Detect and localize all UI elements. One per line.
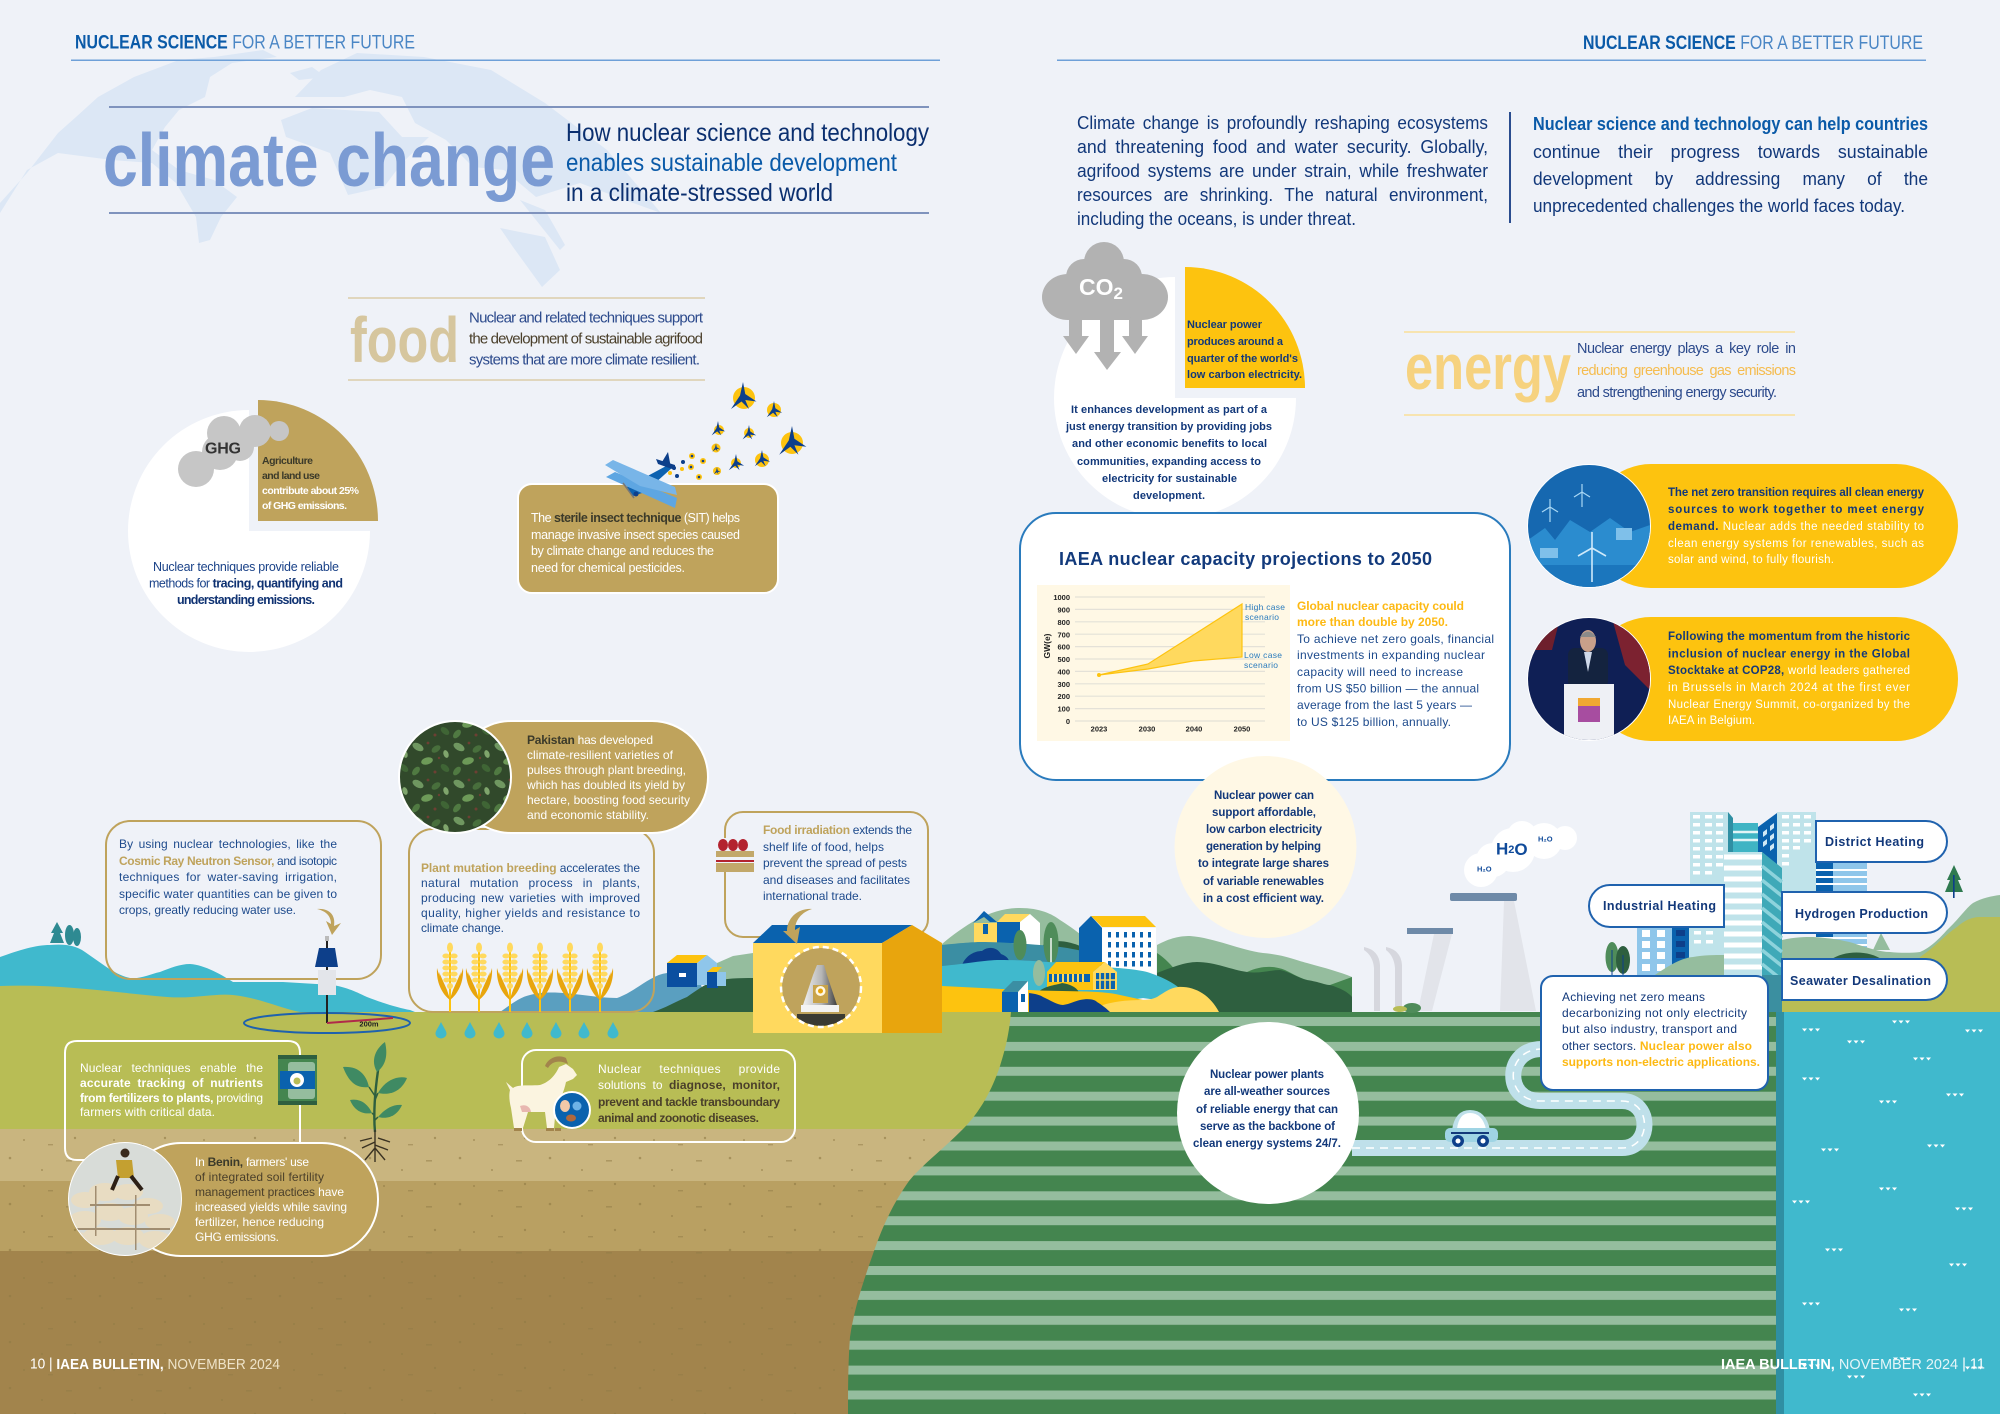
yellow fields xyxy=(942,986,1143,1012)
pill: industrial heating: Industrial Heating xyxy=(1603,899,1716,913)
city back buildings xyxy=(1637,812,1867,977)
icon: pale tree behind hill xyxy=(1873,933,1890,950)
pill: district heating: District Heating xyxy=(1825,835,1924,849)
panel heading: IAEA nuclear capacity projections to 2050 xyxy=(1059,549,1432,569)
energy heading: Nuclear energy plays a key role in xyxy=(1577,341,1796,357)
pill text xyxy=(1668,487,1925,566)
icon: blue and white house xyxy=(997,914,1040,945)
intro lead text: continue their progress towards sustainable xyxy=(1533,142,1928,162)
wedge text: produces around a xyxy=(1187,336,1284,348)
icons: trees xyxy=(1014,922,1058,964)
line chart: scenario xyxy=(1244,660,1278,670)
callout: affordable low carbon generation: in a cost efficient way. xyxy=(1203,893,1324,905)
pill text: Nuclear Energy Summit, co-organized by the xyxy=(1668,699,1910,711)
pill text: increased yields while saving xyxy=(195,1200,347,1214)
pill text: climate-resilient varieties of xyxy=(527,748,674,762)
chart commentary: capacity will need to increase xyxy=(1297,665,1463,679)
icon: aeroplane xyxy=(605,452,677,508)
label: CO2: 2 xyxy=(1114,284,1123,302)
callout: nuclear power plants: clean energy systems 24/7. xyxy=(1193,1138,1341,1150)
pill text: Pakistan has developed xyxy=(527,733,653,747)
panel: food irradiation: international trade. xyxy=(763,889,862,903)
panel: plant mutation breeding xyxy=(409,829,654,1012)
line chart: 900 xyxy=(1057,606,1070,614)
callout: nuclear power plants: of reliable energy that can xyxy=(1196,1104,1338,1116)
food heading: systems that are more climate resilient. xyxy=(469,352,700,368)
H2O cloud: H xyxy=(1496,840,1508,858)
pill text: GHG emissions. xyxy=(195,1230,279,1244)
line chart: 800 xyxy=(1057,618,1070,627)
sea wave marks xyxy=(1792,1020,1983,1396)
panel: animal diseases: prevent and tackle transboundary xyxy=(598,1095,780,1109)
H2O cloud: 2 xyxy=(1508,844,1514,856)
line chart xyxy=(1037,585,1290,741)
pill text: in Brussels in March 2024 at the first ever xyxy=(1668,682,1910,694)
icon: irradiator xyxy=(781,947,861,1030)
sea xyxy=(1776,1011,2000,1414)
icon: large white building xyxy=(1079,916,1156,974)
label: GHG: GHG xyxy=(205,440,241,458)
pill: nuclear energy summit xyxy=(1527,617,1958,742)
intro text: agrifood systems are under strain, while freshwater xyxy=(1077,161,1488,181)
pill: net zero transition xyxy=(1527,464,1958,588)
callout: affordable low carbon generation: support affordable, xyxy=(1212,807,1316,819)
white circle with cut quadrant xyxy=(1054,277,1296,519)
chart commentary: investments in expanding nuclear xyxy=(1297,648,1485,662)
icon: sterile insects xyxy=(668,382,806,480)
pill text: demand. Nuclear adds the needed stability to xyxy=(1668,521,1924,533)
pill text xyxy=(1668,631,1911,727)
line chart: scenario xyxy=(1245,612,1279,622)
pill: seawater desalination xyxy=(1782,959,1947,1000)
vertical divider xyxy=(1509,112,1511,223)
panel: nutrient tracking: farmers with critical data. xyxy=(80,1105,215,1119)
pill text: sources to work together to meet energy xyxy=(1668,504,1925,516)
hills and houses of town xyxy=(942,908,1219,1012)
energy heading xyxy=(1404,331,1796,416)
icon: neutron sensor xyxy=(244,936,410,1033)
arrow: to sensor xyxy=(317,909,341,935)
right page footer: IAEA BULLETIN, NOVEMBER 2024 | 11 xyxy=(1721,1356,1985,1372)
icon: water drops xyxy=(436,1022,618,1038)
line chart: 2040 xyxy=(1186,724,1202,734)
panel: animal diseases: solutions to diagnose, monitor, xyxy=(598,1078,780,1092)
hills east of town xyxy=(1157,936,1352,1012)
panel: plant mutation breeding: quality, higher yields and resistance to xyxy=(421,906,640,920)
pill text: solar and wind, to fully flourish. xyxy=(1668,554,1834,566)
icon: wheat row xyxy=(437,942,613,1012)
left page footer: 10 | IAEA BULLETIN, NOVEMBER 2024 xyxy=(30,1356,280,1372)
icon: CO2 cloud and arrows xyxy=(1042,242,1168,370)
panel: water-saving irrigation: Cosmic Ray Neutron Sensor, and isotopic xyxy=(119,854,337,868)
ground: olive field xyxy=(0,986,1012,1129)
H2O cloud xyxy=(1464,821,1577,887)
pill text: which has doubled its yield by xyxy=(526,778,685,792)
panel: plant mutation breeding: natural mutation process in plants, xyxy=(421,876,640,890)
barn with irradiator xyxy=(753,925,942,1033)
callout: affordable low carbon generation: generation by helping xyxy=(1206,841,1321,853)
line chart: 500 xyxy=(1057,655,1070,664)
wedge text xyxy=(262,455,360,512)
intro lead text: unprecedented challenges the world faces today. xyxy=(1533,196,1905,216)
line chart: High case xyxy=(1245,602,1285,612)
panel: water-saving irrigation: specific water quantities can be given to xyxy=(119,887,337,901)
pill text: fertilizer, hence reducing xyxy=(195,1215,324,1229)
food heading xyxy=(348,297,705,381)
pill text: and economic stability. xyxy=(527,808,649,822)
circle text: just energy transition by providing jobs xyxy=(1065,421,1272,433)
icon: fertilizer bag xyxy=(278,1055,317,1105)
right hills xyxy=(1782,895,2000,1012)
panel: animal diseases: animal and zoonotic diseases. xyxy=(598,1111,759,1125)
wedge text: contribute about 25% xyxy=(262,485,360,497)
photo: farmer on sacks xyxy=(66,1142,182,1257)
line chart: 2050 xyxy=(1234,724,1250,734)
callout: affordable low carbon generation: low carbon electricity xyxy=(1206,824,1323,836)
panel: plant mutation breeding: climate change. xyxy=(421,921,504,935)
wedge text xyxy=(1187,319,1302,381)
chart commentary: Global nuclear capacity could xyxy=(1297,599,1464,613)
energy heading: reducing greenhouse gas emissions xyxy=(1577,363,1796,379)
pill text: inclusion of nuclear energy in the Global xyxy=(1668,649,1910,661)
methods text: Nuclear techniques provide reliable xyxy=(153,560,339,574)
yellow wedge xyxy=(1185,267,1305,388)
pill: district heating xyxy=(1816,821,1947,862)
callout: nuclear power plants: Nuclear power plants xyxy=(1210,1069,1324,1081)
gold wedge xyxy=(258,400,378,521)
front tower xyxy=(1724,852,1782,1012)
callout: achieving net zero: but also industry, transport and xyxy=(1562,1022,1737,1036)
icon: crate of tomatoes xyxy=(716,838,754,872)
line chart: 600 xyxy=(1057,642,1070,652)
panel: animal diseases: Nuclear techniques provide xyxy=(598,1062,780,1076)
circle text: and other economic benefits to local xyxy=(1072,438,1267,450)
line chart: 300 xyxy=(1057,680,1070,689)
line chart: 0 xyxy=(1066,717,1070,726)
circle text: communities, expanding access to xyxy=(1077,456,1261,468)
food heading: the development of sustainable agrifood xyxy=(469,330,703,348)
callout: affordable low carbon generation: of variable renewables xyxy=(1203,876,1324,888)
left page header: NUCLEAR SCIENCE FOR A BETTER FUTURE xyxy=(75,32,415,53)
icon: goat and microbes xyxy=(506,1056,590,1131)
line chart: 700 xyxy=(1057,630,1070,640)
callout: affordable low carbon generation: Nuclear power can xyxy=(1214,790,1314,802)
box text: The sterile insect technique (SIT) helps xyxy=(531,511,740,525)
H2O cloud: O xyxy=(1514,840,1528,858)
callout: nuclear power plants xyxy=(1177,1022,1359,1204)
panel: IAEA nuclear capacity projections xyxy=(1020,513,1510,780)
panel: animal diseases xyxy=(522,1050,795,1142)
pill: hydrogen production xyxy=(1782,892,1947,933)
line chart: Low case xyxy=(1244,650,1282,660)
intro lead text: development by addressing many of the xyxy=(1533,169,1928,189)
world map backdrop xyxy=(0,50,661,287)
GHG pie panel xyxy=(128,400,378,652)
photo: wind turbines xyxy=(1527,464,1651,588)
callout: achieving net zero: other sectors. Nuclear power also xyxy=(1562,1039,1752,1053)
green striped field xyxy=(848,1012,1776,1414)
navy bush xyxy=(962,948,1009,966)
panel: water-saving irrigation: By using nuclear technologies, like the xyxy=(119,837,337,851)
pill: seawater desalination: Seawater Desalination xyxy=(1790,974,1931,988)
cooling towers xyxy=(1364,893,1536,1013)
icon: pale tree xyxy=(1033,960,1045,986)
dark teal hill xyxy=(942,942,1082,975)
chart commentary: from US $50 billion — the annual xyxy=(1297,682,1479,696)
title: climate change: climate change xyxy=(103,118,555,202)
chart commentary: To achieve net zero goals, financial xyxy=(1297,632,1494,646)
pill text: Stocktake at COP28, world leaders gathered xyxy=(1668,665,1910,677)
title subtitle: enables sustainable development xyxy=(566,149,897,177)
panel: plant mutation breeding: producing new varieties with improved xyxy=(421,891,640,905)
wedge text: quarter of the world's xyxy=(1187,353,1298,365)
line chart: 200 xyxy=(1057,692,1070,701)
box text: manage invasive insect species caused xyxy=(531,528,740,542)
title subtitle xyxy=(566,119,929,207)
title subtitle: How nuclear science and technology xyxy=(566,119,929,147)
intro text: including the oceans, is under threat. xyxy=(1077,209,1356,229)
circle text: development. xyxy=(1133,490,1205,502)
line chart: GW(e) xyxy=(1042,633,1052,659)
ground: teal hills left xyxy=(0,945,420,1014)
panel: nutrient tracking: from fertilizers to plants, providing xyxy=(80,1091,263,1105)
pill: Benin soil fertility xyxy=(66,1142,378,1257)
pill text: The net zero transition requires all clean energy xyxy=(1668,487,1925,499)
photo: pulses plants xyxy=(399,721,511,833)
intro text xyxy=(1077,113,1488,229)
chart commentary: average from the last 5 years — xyxy=(1297,698,1472,712)
icon: car xyxy=(1445,1110,1498,1147)
energy heading: energy xyxy=(1405,331,1571,403)
methods text: understanding emissions. xyxy=(177,593,315,607)
icon: small house near wheat xyxy=(667,955,726,988)
intro text: and threatening food and water security. Globally, xyxy=(1077,137,1488,157)
ground: far hills behind field xyxy=(500,953,753,1012)
arrow: to barn xyxy=(783,909,812,944)
soil layers xyxy=(0,1129,1012,1414)
panel: nutrient tracking: Nuclear techniques enable the xyxy=(80,1061,263,1075)
icon: trees left xyxy=(50,922,81,946)
callout: achieving net zero xyxy=(1541,976,1768,1090)
intro text: resources are shrinking. The natural environment, xyxy=(1077,185,1488,205)
pill text: pulses through plant breeding, xyxy=(527,763,686,777)
line chart: 2023 xyxy=(1091,724,1107,734)
pill text: In Benin, farmers' use xyxy=(195,1155,309,1169)
energy heading: and strengthening energy security. xyxy=(1577,385,1777,401)
sterile insect technique panel xyxy=(518,382,806,593)
photo: speaker at podium xyxy=(1527,617,1651,742)
pill text: IAEA in Belgium. xyxy=(1668,715,1755,727)
line chart: 400 xyxy=(1057,668,1070,676)
label: CO2: CO xyxy=(1079,274,1114,300)
icon: trees by city xyxy=(1606,942,1630,977)
panel: water-saving irrigation: techniques for water-saving irrigation, xyxy=(119,870,337,884)
panel: water-saving irrigation: crops, greatly reducing water use. xyxy=(119,903,296,917)
panel: plant mutation breeding: Plant mutation breeding accelerates the xyxy=(421,861,640,875)
hill under lower buildings xyxy=(1652,955,1724,977)
H2O cloud: H₂O xyxy=(1538,834,1553,844)
intro lead text xyxy=(1533,114,1928,216)
callout: nuclear power plants: are all-weather sources xyxy=(1204,1086,1330,1098)
panel: food irradiation xyxy=(725,812,928,937)
back hill xyxy=(942,908,1080,960)
road xyxy=(1352,1049,1644,1148)
icon: GHG cloud xyxy=(178,415,289,487)
pill text xyxy=(195,1155,347,1244)
icon: small yellow house xyxy=(973,911,997,943)
panel: food irradiation: prevent the spread of pests xyxy=(763,856,907,870)
pill: industrial heating xyxy=(1589,885,1724,927)
pill text: Following the momentum from the historic xyxy=(1668,631,1911,643)
wedge text: low carbon electricity. xyxy=(1187,369,1302,381)
wedge text: and land use xyxy=(262,470,320,482)
circle text xyxy=(1065,404,1272,502)
box text xyxy=(531,511,740,575)
H2O cloud: H₂O xyxy=(1477,864,1492,874)
food heading: food xyxy=(350,304,459,376)
circle text: It enhances development as part of a xyxy=(1071,404,1268,416)
intro text: Climate change is profoundly reshaping ecosystems xyxy=(1077,113,1488,133)
title subtitle: in a climate-stressed world xyxy=(566,179,833,207)
white circle with cut quadrant xyxy=(128,410,370,652)
pill text: management practices have xyxy=(195,1185,344,1199)
methods text: methods for tracing, quantifying and xyxy=(149,576,343,590)
chart commentary: to US $125 billion, annually. xyxy=(1297,715,1451,729)
line chart: 1000 xyxy=(1053,593,1070,602)
food heading: Nuclear and related techniques support xyxy=(469,310,704,326)
pill text: of integrated soil fertility xyxy=(195,1170,324,1184)
callout: achieving net zero: Achieving net zero means xyxy=(1562,990,1705,1004)
pill text xyxy=(526,733,690,822)
wedge text: of GHG emissions. xyxy=(262,500,347,512)
panel: nutrient tracking: accurate tracking of nutrients xyxy=(80,1076,263,1090)
chart commentary: more than double by 2050. xyxy=(1297,615,1448,629)
icon: white and blue cottage xyxy=(1002,981,1028,1012)
icon: plant with roots xyxy=(343,1042,407,1162)
callout: affordable low carbon generation xyxy=(1174,756,1356,938)
chart commentary xyxy=(1297,599,1494,729)
gold text box xyxy=(518,484,778,593)
wedge text: Nuclear power xyxy=(1187,319,1263,331)
pill: Pakistan pulses xyxy=(399,721,708,833)
pill text: hectare, boosting food security xyxy=(527,793,690,807)
pill: hydrogen production: Hydrogen Production xyxy=(1795,907,1928,921)
panel: water-saving irrigation xyxy=(106,821,381,979)
callout: nuclear power plants: serve as the backbone of xyxy=(1200,1121,1335,1133)
line chart: 100 xyxy=(1057,704,1070,714)
panel: food irradiation: shelf life of food, helps xyxy=(763,840,884,854)
box text: need for chemical pesticides. xyxy=(531,561,685,575)
line chart: 2030 xyxy=(1139,724,1155,734)
box text: by climate change and reduces the xyxy=(531,544,714,558)
callout: affordable low carbon generation: to integrate large shares xyxy=(1198,858,1329,870)
methods text xyxy=(149,560,343,607)
panel: food irradiation: and diseases and facilitates xyxy=(763,873,910,887)
panel: nutrient tracking xyxy=(65,1041,300,1160)
icon: yellow building xyxy=(1047,962,1117,990)
wedge text: Agriculture xyxy=(262,455,313,467)
pill text: clean energy systems for renewables, such as xyxy=(1668,538,1924,550)
callout: achieving net zero: decarbonizing not only electricity xyxy=(1562,1006,1747,1020)
panel: food irradiation: Food irradiation extends the xyxy=(763,823,912,837)
right page header: NUCLEAR SCIENCE FOR A BETTER FUTURE xyxy=(1583,32,1923,54)
teal hill xyxy=(942,960,1178,1005)
CO2 pie panel xyxy=(1042,242,1305,519)
circle text: electricity for sustainable xyxy=(1102,473,1237,485)
intro lead text: Nuclear science and technology can help countries xyxy=(1533,114,1928,134)
callout: achieving net zero: supports non-electric applications. xyxy=(1562,1055,1760,1069)
icon: neutron sensor: 200m xyxy=(359,1020,379,1028)
icon: tree far right xyxy=(1945,865,1963,898)
